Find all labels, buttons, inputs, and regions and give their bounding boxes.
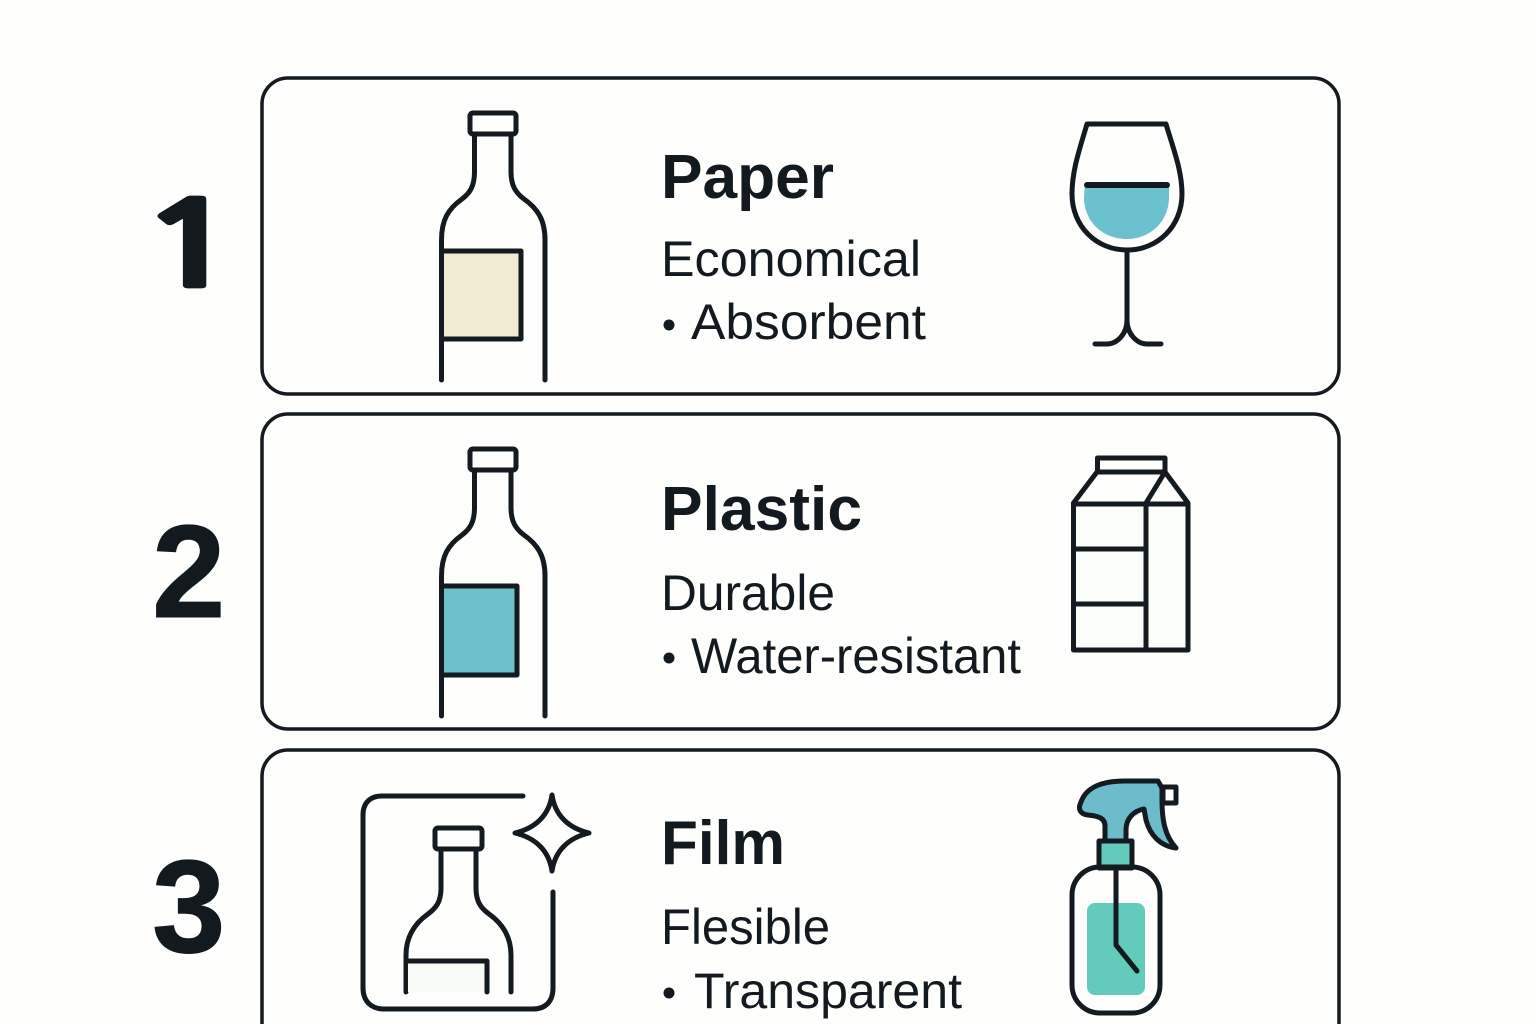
- panel: Plastic: [152, 414, 1339, 729]
- heading: Plastic: Plastic: [661, 475, 862, 544]
- number 1: 1: [137, 188, 244, 305]
- heading: Film: Film: [661, 809, 785, 878]
- number 2: 2: [152, 498, 225, 645]
- number 3: 3: [152, 833, 225, 980]
- icon: spray bottle: [1072, 781, 1176, 1013]
- text: Economical: Economical: [661, 231, 921, 287]
- text: Transparent: Transparent: [694, 963, 962, 1019]
- icon: bottle with plastic label: [442, 449, 545, 716]
- text: Durable: Durable: [661, 565, 835, 621]
- icon: bottle in frame with sparkle: [363, 795, 589, 1009]
- text: Absorbent: Absorbent: [691, 294, 926, 350]
- icon: milk carton: [1074, 458, 1188, 650]
- panel: Film: [152, 750, 1339, 1024]
- icon: wine glass: [1072, 124, 1182, 344]
- icon: bottle with paper label: [442, 113, 545, 380]
- text: Water-resistant: Water-resistant: [691, 628, 1021, 684]
- heading: Paper: Paper: [661, 143, 834, 212]
- panel: Paper: [137, 78, 1339, 394]
- text: Flesible: Flesible: [661, 899, 830, 955]
